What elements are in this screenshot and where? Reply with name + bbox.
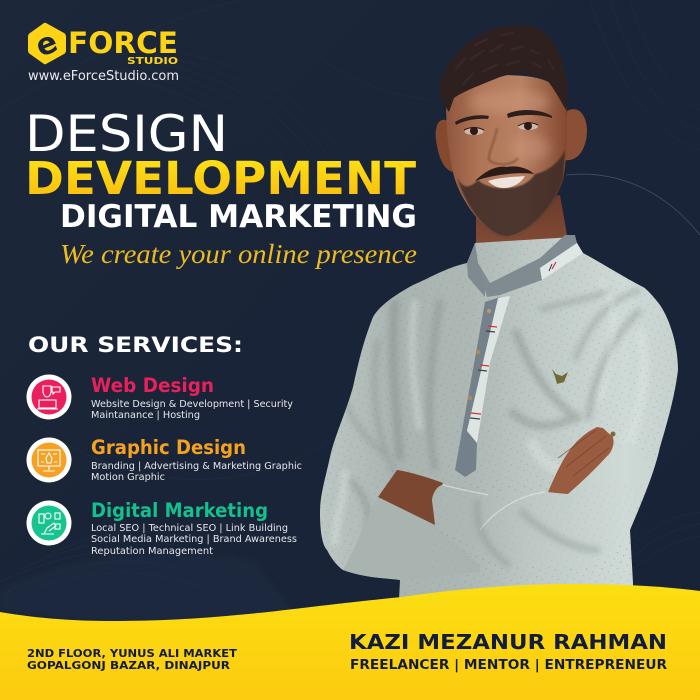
service description: Local SEO | Technical SEO | Link Building [91,523,288,534]
tucked forearm [378,470,443,525]
headline [25,105,417,269]
address: GOPALGONJ BAZAR, DINAJPUR [27,660,230,672]
service: web design [26,374,293,421]
placket [455,296,510,477]
service title: Digital Marketing [91,499,268,522]
service description: Website Design & Development | Security [91,399,293,410]
service description: Motion Graphic [91,472,165,483]
folds [346,287,642,524]
portrait [310,25,690,620]
service description: Reputation Management [91,546,213,557]
service description [91,523,297,557]
service title: Web Design [91,374,214,397]
beard [457,150,565,237]
service description [91,461,302,483]
service description [91,399,293,421]
roles: FREELANCER | MENTOR | ENTREPRENEUR [350,657,668,673]
service title: Graphic Design [91,436,246,459]
service: digital marketing [26,499,297,557]
forehead highlight [470,90,550,114]
address: 2ND FLOOR, YUNUS ALI MARKET [27,648,238,660]
highlights [332,288,615,544]
icon: web design [26,374,72,420]
crossed forearm sleeve [432,440,650,570]
shirt [320,238,678,598]
service description: Branding | Advertising & Marketing Graphic [91,461,302,472]
icon: digital marketing [26,500,72,546]
headline: digital marketing: DIGITAL MARKETING [60,199,417,235]
mustache [475,166,534,181]
left arm sleeve [343,497,480,580]
eyebrows [455,110,552,125]
website url: www.eForceStudio.com [28,69,179,84]
logo hexagon: e [31,24,63,65]
mouth and teeth [488,176,525,188]
headline: design: DESIGN [25,105,228,163]
tagline: We create your online presence [60,239,417,269]
shirt emblem [552,369,568,384]
service: graphic design [26,436,302,483]
headline: development: DEVELOPMENT [25,152,416,205]
icon: graphic design [26,438,72,482]
hand [548,427,616,495]
collar [467,235,583,297]
shirt dot print [321,238,676,596]
face [446,75,567,237]
logo wordmark FORCE: FORCE [68,26,178,60]
address [27,648,238,672]
logo [28,23,179,84]
logo wordmark STUDIO: STUDIO [127,56,178,67]
lighter wave at lower left [0,552,295,625]
footer band [0,584,700,700]
ears [436,109,587,172]
eyes [455,110,552,135]
hair [440,25,568,112]
neck [476,195,567,283]
cheek highlight [510,135,550,161]
name: KAZI MEZANUR RAHMAN [349,630,667,654]
services heading: OUR SERVICES: [28,333,243,357]
service description: Social Media Marketing | Brand Awareness [91,534,297,545]
service description: Maintanance | Hosting [91,410,200,421]
nose [489,128,518,164]
